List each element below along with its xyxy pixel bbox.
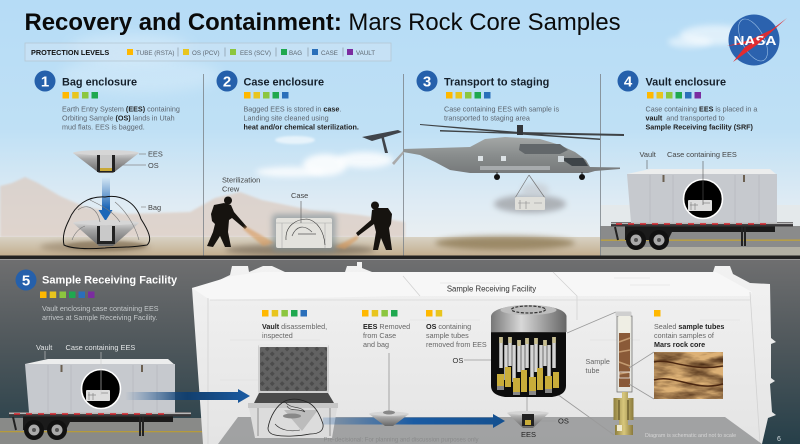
diagram: EES cone and OS [73,150,146,173]
vault on trailer [9,351,191,440]
legend: protection levels: TUBE (RSTA) [136,50,174,57]
panel 2: case enclosure [207,70,392,252]
helicopter tail rotor at panel 2 edge [362,130,404,165]
road: panel 5 [0,418,205,444]
description: arrives at Sample Receiving Facility. [42,313,157,322]
step: OS with sample tubes [426,305,616,439]
legend: protection levels: CASE [321,50,338,57]
spray: right [335,235,358,249]
heading: Sample Receiving Facility [42,274,178,286]
legend: protection levels [25,43,391,61]
protection squares [40,292,94,298]
arrow: down into bag [98,177,112,221]
caption: Mars rock core [654,340,705,349]
caption: EES Removed [363,322,410,331]
facility label: Sample Receiving Facility [447,284,536,294]
open case with bag [248,344,338,438]
label EES: EES [148,150,163,158]
description: Case containing EES with sample is [444,104,559,114]
disclaimer: Pre-decisional: For planning and discussion purposes only [323,438,479,444]
caption: contain samples of [654,331,714,340]
slung case in dust cloud [494,175,566,213]
ground: panels 1 to 3 [0,236,600,256]
legend: protection levels: VAULT [356,50,375,57]
legend: protection levels: OS (PCV) [192,50,220,57]
number badge 3: 3 [423,74,431,90]
NASA logo [727,14,787,66]
label Vault: Vault [640,150,656,159]
number badge 2 [216,70,238,92]
label sterilization crew: Sterilization [222,176,260,184]
caption: Vault disassembled, [262,322,327,331]
number badge 5: 5 [22,272,30,290]
label sterilization crew: Crew [222,184,240,194]
legend: protection levels: PROTECTION LEVELS [31,48,109,57]
protection squares [62,92,98,98]
mountains [0,177,405,250]
number badge 5 [16,270,36,290]
label case containing EES: Case containing EES [667,150,737,159]
caption: removed from EES [426,340,487,349]
label sample tube: tube [586,366,600,375]
protection squares [446,92,490,98]
label Vault: Vault [36,343,52,352]
arrow: case to OS [323,414,505,428]
description: Case containing EES is placed in a [646,104,757,114]
description: Bagged EES is stored in case. [244,104,341,114]
arrow: vault to case [125,389,250,403]
protection squares [647,92,701,98]
description: vault [646,114,663,122]
page number: 6 [777,436,781,443]
panel 1: bag enclosure [34,70,180,251]
number badge 4: 4 [624,74,633,90]
legend: protection levels: BAG [289,50,302,57]
description: Landing site cleaned using [244,114,329,122]
case with bag [272,201,336,252]
number badge 4 [618,70,638,92]
caption: OS containing [426,322,471,331]
caption: Sealed sample tubes [654,322,724,331]
caption: and bag [363,340,389,349]
road: panel 4 [600,205,800,256]
heading: Bag enclosure [62,76,137,88]
description: Earth Entry System (EES) containing [62,104,180,114]
NASA logo: NASA [734,34,776,48]
spray: left [243,226,275,246]
sample tube [614,312,634,435]
background: sky [0,0,800,258]
description: mud flats. EES is bagged. [62,122,145,132]
heading: Vault enclosure [646,76,726,88]
heading: Case enclosure [244,76,324,88]
photo: Mars rock core [654,352,723,399]
silhouette: left crew member [207,196,247,247]
panel 5: sample receiving facility [9,270,191,440]
number badge 1: 1 [41,74,49,90]
facility floor [218,417,762,444]
silhouette: right crew member [356,202,392,250]
clouds [60,25,750,177]
step: vault disassembled [248,310,338,438]
number badge 2: 2 [223,74,231,90]
description: Orbiting Sample (OS) lands in Utah [62,114,175,122]
orbiting sample canister [491,305,566,397]
heading: Transport to staging [444,76,549,88]
scale note: Diagram is schematic and not to scale [645,433,736,439]
diagram: bagged EES [63,196,150,251]
label case containing EES: Case containing EES [66,343,135,352]
facility building [192,262,776,444]
leader lines to rock image [629,352,654,399]
helicopter [403,124,624,180]
protection squares [244,92,288,98]
legend: protection levels: EES (SCV) [240,50,271,57]
step: sample tube [586,310,724,435]
panel dividers [204,74,600,257]
label EES: EES [521,430,536,439]
caption: inspected [262,331,293,340]
description: heat and/or chemical sterilization. [244,122,359,132]
protection squares [262,310,307,316]
small EES with OS [507,411,549,428]
label OS: OS [558,416,569,426]
description: and transported to [664,114,725,122]
protection squares [362,310,398,316]
label Case: Case [291,191,308,200]
caption: sample tubes [426,331,469,340]
leader lines [464,312,616,435]
caption: from Case [363,331,396,340]
label OS: OS [148,161,159,170]
title: Recovery and Containment: Mars Rock Core Samples [24,9,621,36]
label OS: OS [452,356,463,365]
number badge 3 [416,70,438,92]
vault on trailer [611,160,793,250]
number badge 1 [34,70,56,92]
EES cone [369,353,409,426]
panel 4: vault enclosure [611,70,793,250]
description: transported to staging area [444,114,530,122]
protection square [654,310,660,316]
description: Sample Receiving facility (SRF) [646,122,754,132]
label Bag: Bag [148,203,161,212]
protection squares [426,310,442,316]
step: EES removed [362,310,410,426]
dark band and lower background [0,256,800,444]
panel 3: transport to staging [403,70,624,213]
description: Vault enclosing case containing EES [42,304,159,313]
label sample tube: Sample [586,357,610,366]
